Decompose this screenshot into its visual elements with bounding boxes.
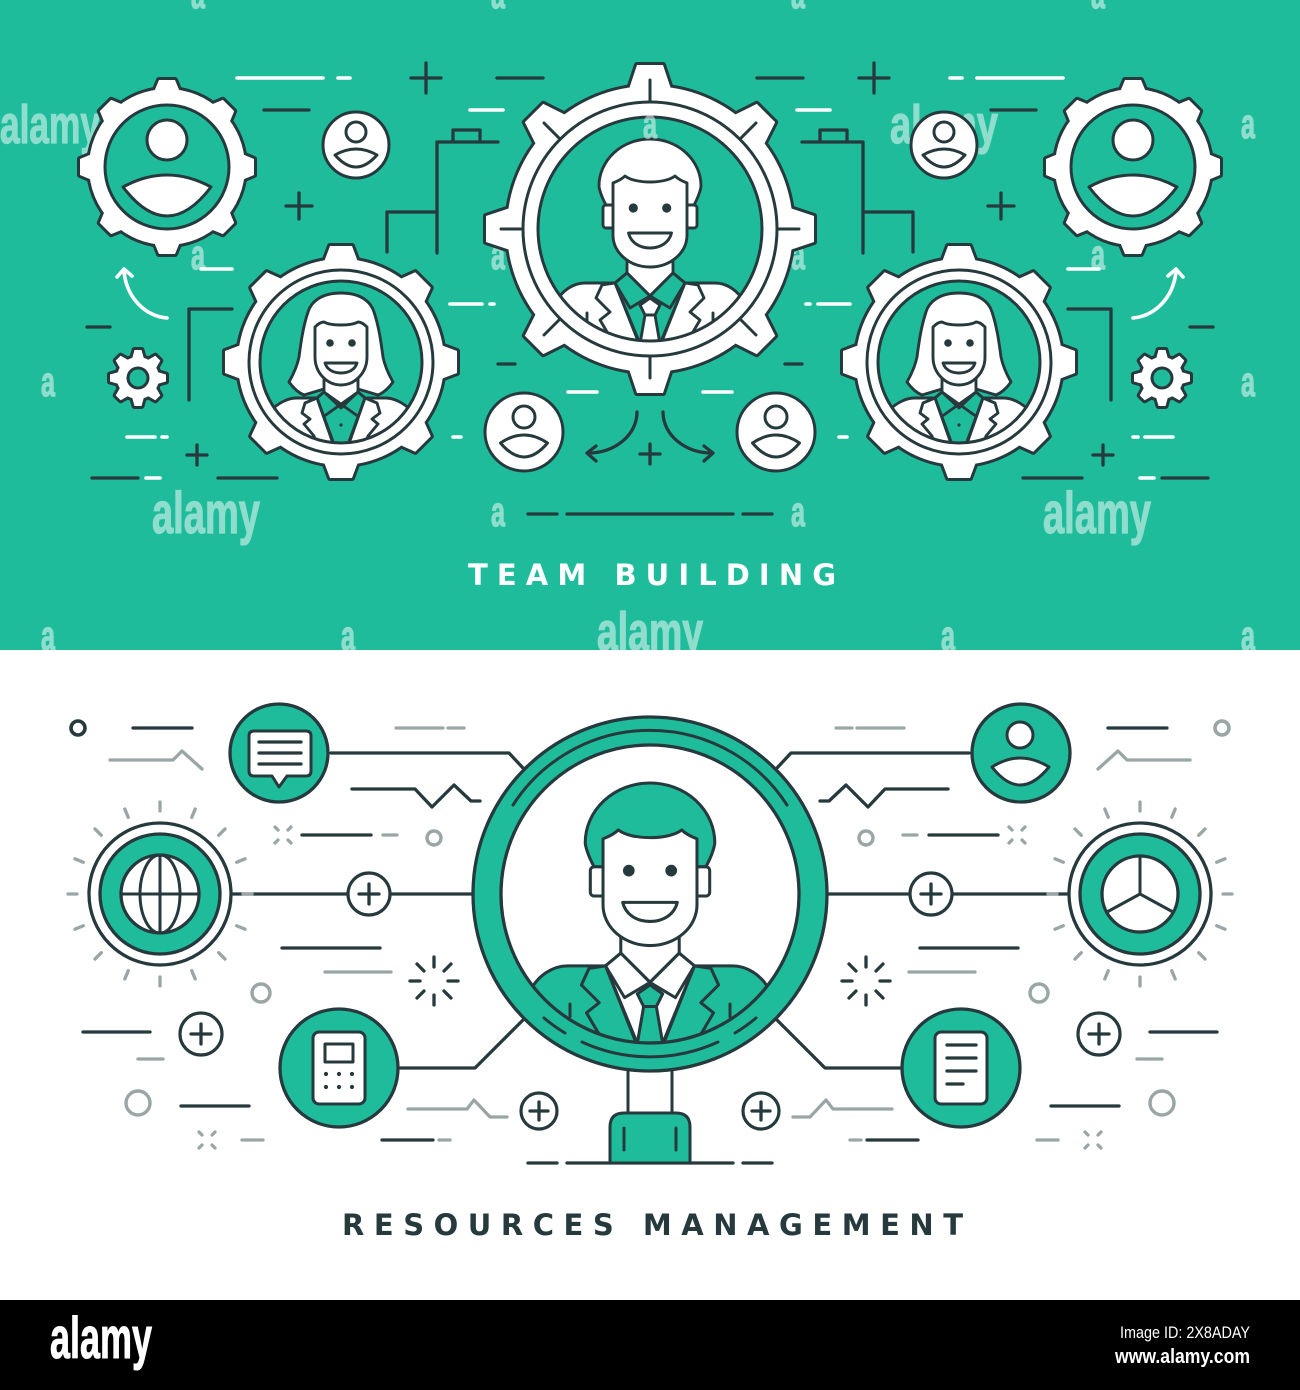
watermark marks: a <box>1091 231 1105 278</box>
watermark marks: a <box>1241 100 1255 147</box>
footer logo: alamy <box>50 1306 152 1371</box>
title: resources management: RESOURCES MANAGEMENT <box>342 1208 963 1242</box>
gear: central man portrait: a <box>643 100 657 147</box>
watermark marks: a <box>341 358 355 405</box>
watermark marks: a <box>491 488 505 535</box>
divider line under magnifier <box>528 1161 772 1165</box>
footer image id: Image ID: 2X8ADAY <box>1120 1323 1250 1342</box>
watermark marks: a <box>791 488 805 535</box>
icon: document <box>902 1009 1020 1127</box>
watermark marks: a <box>941 358 955 405</box>
gear: central man portrait <box>486 65 814 393</box>
illustration: resources right side <box>743 728 1232 1148</box>
watermark marks: a <box>341 612 355 659</box>
plus below central gear <box>640 444 660 464</box>
ring: dark top left <box>71 721 85 735</box>
title: team building: TEAM BUILDING <box>468 558 836 592</box>
watermark marks: a <box>191 231 205 278</box>
watermark marks: a <box>791 231 805 278</box>
watermark marks: a <box>1241 358 1255 405</box>
watermark marks: alamy <box>597 602 703 662</box>
icon: calculator <box>280 1009 398 1127</box>
icon: globe badge <box>89 823 231 965</box>
watermark marks: alamy <box>0 95 100 155</box>
watermark marks: a <box>41 358 55 405</box>
panel: team building background <box>0 0 1300 650</box>
icon: person badge <box>972 704 1070 802</box>
footer bar <box>0 1300 1300 1390</box>
watermark marks: a <box>1241 612 1255 659</box>
watermark marks <box>0 0 1255 662</box>
illustration: team gears right side <box>663 63 1220 478</box>
footer url: www.alamy.com <box>1114 1346 1250 1368</box>
ring: grey top right <box>1215 721 1229 735</box>
divider line under team illustration <box>528 512 772 516</box>
panel: resources management background <box>0 650 1300 1300</box>
illustration: resources left side <box>68 728 557 1148</box>
watermark marks: alamy <box>1043 481 1151 546</box>
magnifier with man portrait <box>473 717 827 1163</box>
watermark marks: a <box>491 231 505 278</box>
icon: pie chart badge <box>1069 823 1211 965</box>
watermark marks: alamy <box>152 481 260 546</box>
illustration: team gears left side <box>80 63 637 478</box>
watermark marks: alamy <box>890 95 998 155</box>
watermark marks: a <box>41 612 55 659</box>
watermark marks: a <box>941 612 955 659</box>
icon: chat bubble <box>230 704 328 802</box>
